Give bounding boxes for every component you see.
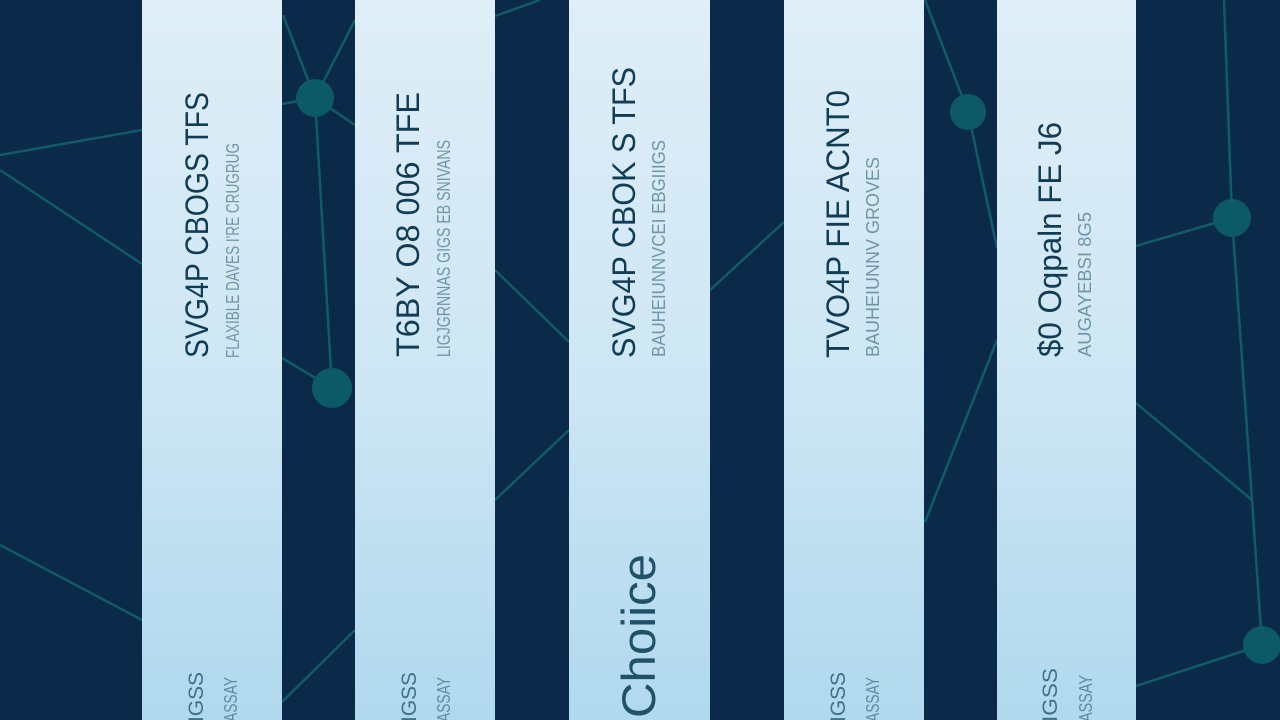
network node 1 [296,79,334,117]
network node 5 [1243,626,1280,664]
column 4 heading: TVO4P FIE ACNT0 [820,90,856,358]
column 1 description: FLAXIBLE DAVES I'RE CRUGRUG [223,143,243,358]
column 2 heading: T6BY O8 006 TFE [390,92,426,357]
column 4 description: BAUHEIUNNV GROVES [863,157,883,357]
panel: column 1 [142,0,282,720]
column 5 heading: $0 Oqpaln FE J6 [1032,122,1068,357]
network node 2 [312,368,352,408]
panel: column 2 [355,0,495,720]
network node 3 [950,94,986,130]
column 1 heading: SVG4P CBOGS TFS [179,92,215,358]
column 3 heading: SVG4P CBOK S TFS [606,67,642,358]
network node 4 [1213,199,1251,237]
panel: column 5 [997,0,1136,720]
column 3 description: BAUHEIUNNVCEI EBGIIIGS [649,140,669,357]
column 5 description: AUGAYEBSI 8G5 [1075,212,1095,357]
panel: column 4 [784,0,924,720]
column 3 large word: Choiice [612,554,665,718]
column 2 description: LIGJGRNNAS GIGS EB SNIVANS [434,140,454,357]
panel: column 3 [569,0,710,720]
